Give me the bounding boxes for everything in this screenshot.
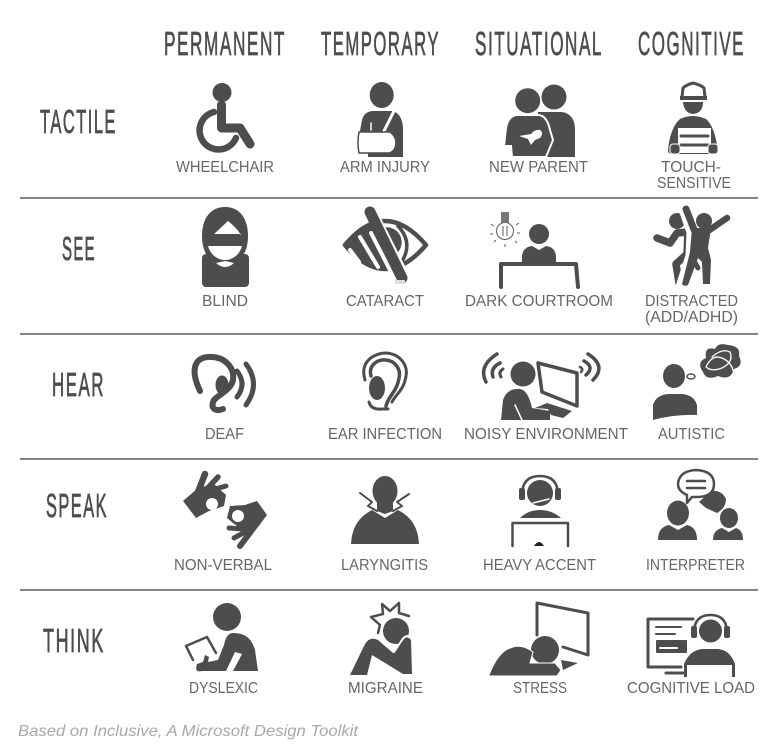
label: cognitive load: COGNITIVE LOAD	[627, 680, 755, 697]
row: see: SEE	[62, 230, 96, 267]
icon: wheelchair	[200, 83, 250, 149]
footer credit: Based on Inclusive, A Microsoft Design Toolkit	[18, 723, 359, 740]
row: see	[62, 207, 738, 326]
label: laryngitis: LARYNGITIS	[341, 557, 428, 574]
label: blind: BLIND	[202, 293, 248, 310]
label: distracted: (ADD/ADHD)	[645, 309, 738, 326]
icon: laryngitis	[351, 476, 419, 544]
row: speak: SPEAK	[46, 487, 108, 524]
label: cataract: CATARACT	[346, 293, 425, 310]
icon: heavy accent	[512, 476, 568, 546]
icon: noisy environment	[484, 354, 599, 420]
row: tactile	[40, 82, 731, 192]
row: hear	[52, 344, 741, 443]
label: distracted	[645, 293, 738, 326]
icon: deaf	[195, 357, 254, 410]
label: touch-sensitive: TOUCH-	[661, 159, 721, 176]
label: touch-sensitive	[657, 159, 731, 192]
label: autistic: AUTISTIC	[658, 426, 725, 443]
label: ear infection: EAR INFECTION	[328, 426, 442, 443]
label: distracted: DISTRACTED	[645, 293, 738, 310]
column headings: PERMANENT	[164, 25, 286, 62]
icon: touch-sensitive	[668, 83, 718, 154]
row: think	[43, 603, 755, 697]
label: non-verbal: NON-VERBAL	[174, 557, 272, 574]
label: dyslexic: DYSLEXIC	[189, 680, 258, 697]
column headings: SITUATIONAL	[475, 25, 603, 62]
icon: dyslexic	[186, 603, 258, 671]
icon: dark courtroom	[490, 212, 578, 287]
icon: non-verbal	[183, 474, 267, 546]
icon: distracted	[657, 209, 727, 287]
label: noisy environment: NOISY ENVIRONMENT	[464, 426, 629, 443]
label: interpreter: INTERPRETER	[646, 557, 745, 574]
label: touch-sensitive: SENSITIVE	[657, 175, 731, 192]
row heading: hear: HEAR	[52, 366, 105, 403]
column headings	[164, 25, 745, 62]
row: tactile: TACTILE	[40, 103, 117, 140]
icon: blind	[202, 207, 249, 287]
icon: arm injury	[358, 82, 403, 157]
icon: stress	[489, 603, 588, 676]
icon: autistic	[653, 344, 741, 420]
row: speak	[46, 470, 745, 574]
label: migraine: MIGRAINE	[348, 680, 423, 697]
label: wheelchair: WHEELCHAIR	[176, 159, 274, 176]
label: new parent: NEW PARENT	[489, 159, 589, 176]
label: dark courtroom: DARK COURTROOM	[465, 293, 613, 310]
label: heavy accent: HEAVY ACCENT	[483, 557, 597, 574]
icon: cognitive load	[648, 615, 735, 678]
icon: cataract	[343, 212, 426, 284]
label: deaf: DEAF	[205, 426, 244, 443]
icon: ear infection	[364, 353, 406, 409]
icon: migraine	[350, 603, 412, 675]
column headings: TEMPORARY	[321, 25, 440, 62]
label: stress: STRESS	[513, 680, 567, 697]
row heading: think: THINK	[43, 622, 105, 659]
label: arm injury: ARM INJURY	[340, 159, 430, 176]
icon: new parent	[504, 84, 575, 157]
icon: interpreter	[658, 470, 743, 540]
